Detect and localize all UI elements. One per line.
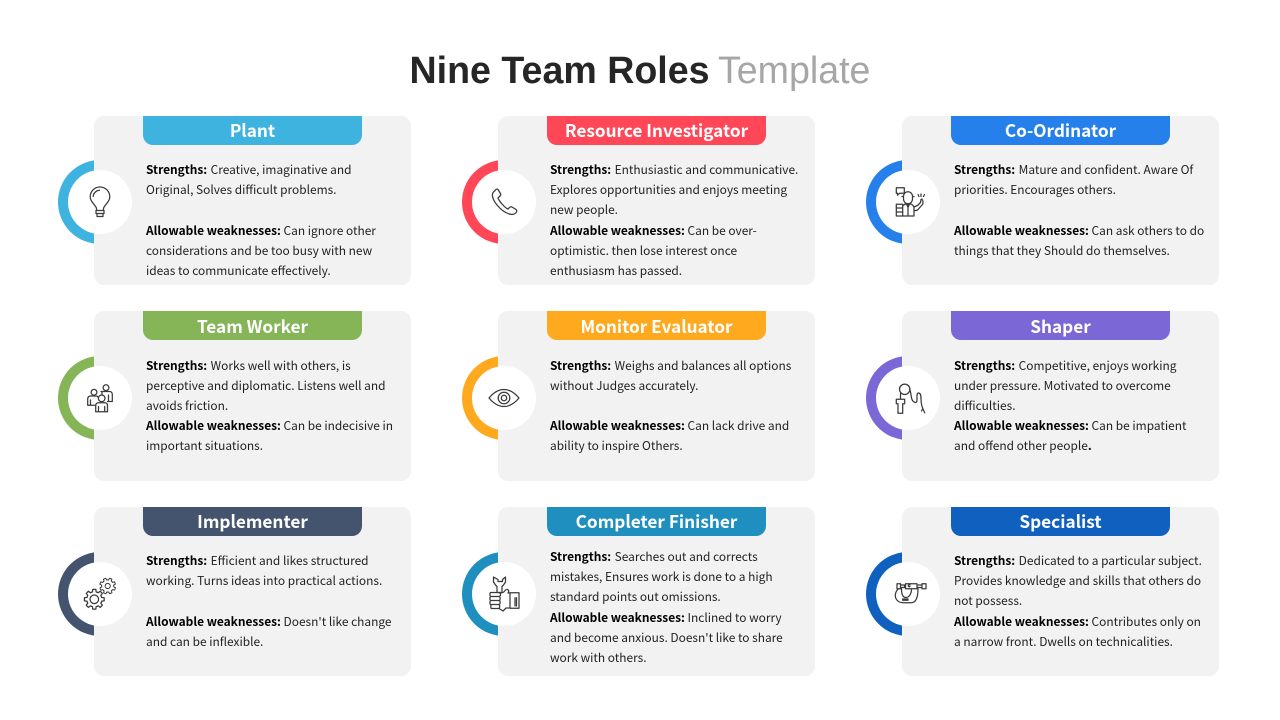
text: Monitor Evaluator: ability to inspire Others. [550,437,683,454]
text: Shaper: under pressure. Motivated to overcome [954,377,1171,394]
text: Team Worker: Strengths: Works well with others, is [146,357,351,374]
card: Co-Ordinator [902,116,1219,285]
heading: Specialist: Specialist [1019,508,1102,533]
icon: telephone [492,188,518,216]
text: Implementer: Strengths: Efficient and likes structured [146,552,369,569]
ring: Team Worker [58,356,94,440]
text: Shaper [954,357,1187,454]
heading: Shaper: Shaper [1030,313,1091,338]
heading: Implementer: Implementer [197,508,308,533]
text: Completer Finisher: work with others. [550,649,647,666]
panel: Implementer [58,507,411,676]
text: Plant: Strengths: Creative, imaginative and [146,161,351,178]
text: Completer Finisher: mistakes, Ensures work is done to a high [550,568,773,585]
icon disc: Shaper [876,366,940,430]
text: Co-Ordinator: Strengths: Mature and confident. Aware Of [954,161,1193,178]
text: Plant: Allowable weaknesses: Can ignore other [146,222,376,239]
text: Monitor Evaluator: Allowable weaknesses: Can lack drive and [550,417,789,434]
icon: skipping rope [896,384,926,414]
text: Specialist: Allowable weaknesses: Contributes only on [954,613,1201,630]
card: Resource Investigator [498,116,815,285]
panel: Plant [58,116,411,285]
text: Team Worker [146,357,393,454]
panel: Specialist [866,507,1219,676]
text: Specialist: Provides knowledge and skills that others do [954,572,1201,589]
text: Plant: considerations and be too busy with new [146,242,372,259]
heading: Plant: Plant [230,117,275,142]
card: Plant [94,116,411,285]
text: Resource Investigator: new people. [550,201,618,218]
panel: Team Worker [58,311,411,481]
heading: Completer Finisher [547,507,766,536]
ring: Implementer [58,552,94,636]
text: Monitor Evaluator: Strengths: Weighs and balances all options [550,357,791,374]
heading: Co-Ordinator [951,116,1170,145]
ring: Completer Finisher [462,552,498,636]
text: Resource Investigator: Strengths: Enthusiastic and communicative. [550,161,798,178]
heading: Monitor Evaluator: Monitor Evaluator [580,313,733,338]
text: Monitor Evaluator: without Judges accurately. [550,377,698,394]
heading: Monitor Evaluator [547,311,766,340]
heading: Implementer [143,507,362,536]
text: Specialist: a narrow front. Dwells on technicalities. [954,633,1173,650]
icon: eye [488,388,520,408]
ring: Plant [58,160,94,244]
title: Nine Team Roles Template [410,49,870,91]
ring: Resource Investigator [462,160,498,244]
text: Team Worker: perceptive and diplomatic. Listens well and [146,377,386,394]
panel: Completer Finisher [462,507,815,676]
text: Resource Investigator: optimistic. then lose interest once [550,242,737,259]
text: Specialist: Strengths: Dedicated to a particular subject. [954,552,1202,569]
text: Completer Finisher: Strengths: Searches out and corrects [550,548,758,565]
text: Implementer: and can be inflexible. [146,633,263,650]
text: Co-Ordinator: priorities. Encourages others. [954,181,1116,198]
icon disc: Team Worker [68,366,132,430]
text: Implementer: Allowable weaknesses: Doesn't like change [146,613,392,630]
panel: Co-Ordinator [866,116,1219,285]
heading: Team Worker [143,311,362,340]
heading: Specialist [951,507,1170,536]
icon: micrometer [894,583,927,604]
text: Co-Ordinator: Allowable weaknesses: Can ask others to do [954,222,1204,239]
text: Plant [146,161,376,279]
heading: Resource Investigator: Resource Investigator [565,117,748,142]
icon disc: Resource Investigator [472,170,536,234]
heading: Plant [143,116,362,145]
card: Shaper [902,311,1219,481]
panel: Shaper [866,311,1219,481]
heading: Shaper [951,311,1170,340]
text: Specialist: not possess. [954,592,1022,609]
icon disc: Specialist [876,562,940,626]
text: Completer Finisher: Allowable weaknesses: Inclined to worry [550,609,782,626]
card: Implementer [94,507,411,676]
text: Completer Finisher [550,548,783,666]
text: Implementer [146,552,392,650]
text: Team Worker: Allowable weaknesses: Can be indecisive in [146,417,393,434]
text: Plant: ideas to communicate effectively. [146,262,331,279]
icon: team of people [87,384,113,412]
heading: Co-Ordinator: Co-Ordinator [1005,117,1116,142]
text: Implementer: working. Turns ideas into practical actions. [146,572,382,589]
ring: Monitor Evaluator [462,356,498,440]
text: Resource Investigator [550,161,798,279]
text: Co-Ordinator: things that they Should do themselves. [954,242,1170,259]
text: Resource Investigator: Allowable weaknesses: Can be over- [550,222,757,239]
heading: Team Worker: Team Worker [197,313,308,338]
text: Specialist [954,552,1202,650]
text: Plant: Original, Solves difficult problems. [146,181,336,198]
text: Co-Ordinator [954,161,1204,259]
ring: Co-Ordinator [866,160,902,244]
icon disc: Implementer [68,562,132,626]
text: Team Worker: avoids friction. [146,397,228,414]
icon: gears [84,578,116,610]
card: Monitor Evaluator [498,311,815,481]
text: Completer Finisher: and become anxious. Doesn't like to share [550,629,783,646]
text: Shaper: Allowable weaknesses: Can be impatient [954,417,1187,434]
text: Shaper: difficulties. [954,397,1016,414]
text: Resource Investigator: enthusiasm has passed. [550,262,682,279]
icon: hand holding wrench [489,576,520,612]
text: Shaper: Strengths: Competitive, enjoys working [954,357,1176,374]
card: Team Worker [94,311,411,481]
heading: Completer Finisher: Completer Finisher [576,508,737,533]
icon: light bulb [90,186,110,218]
text: Completer Finisher: standard points out omissions. [550,588,721,605]
icon disc: Completer Finisher [472,562,536,626]
text: Resource Investigator: Explores opportunities and enjoys meeting [550,181,787,198]
text: Team Worker: important situations. [146,437,263,454]
text: Monitor Evaluator [550,357,791,454]
card: Specialist [902,507,1219,676]
ring: Specialist [866,552,902,636]
ring: Shaper [866,356,902,440]
icon disc: Monitor Evaluator [472,366,536,430]
icon disc: Plant [68,170,132,234]
icon disc: Co-Ordinator [876,170,940,234]
card: Completer Finisher [498,507,815,676]
panel: Resource Investigator [462,116,815,285]
text: Shaper: and offend other people. [954,437,1092,454]
icon: speaker with clipboard [896,187,926,217]
panel: Monitor Evaluator [462,311,815,481]
